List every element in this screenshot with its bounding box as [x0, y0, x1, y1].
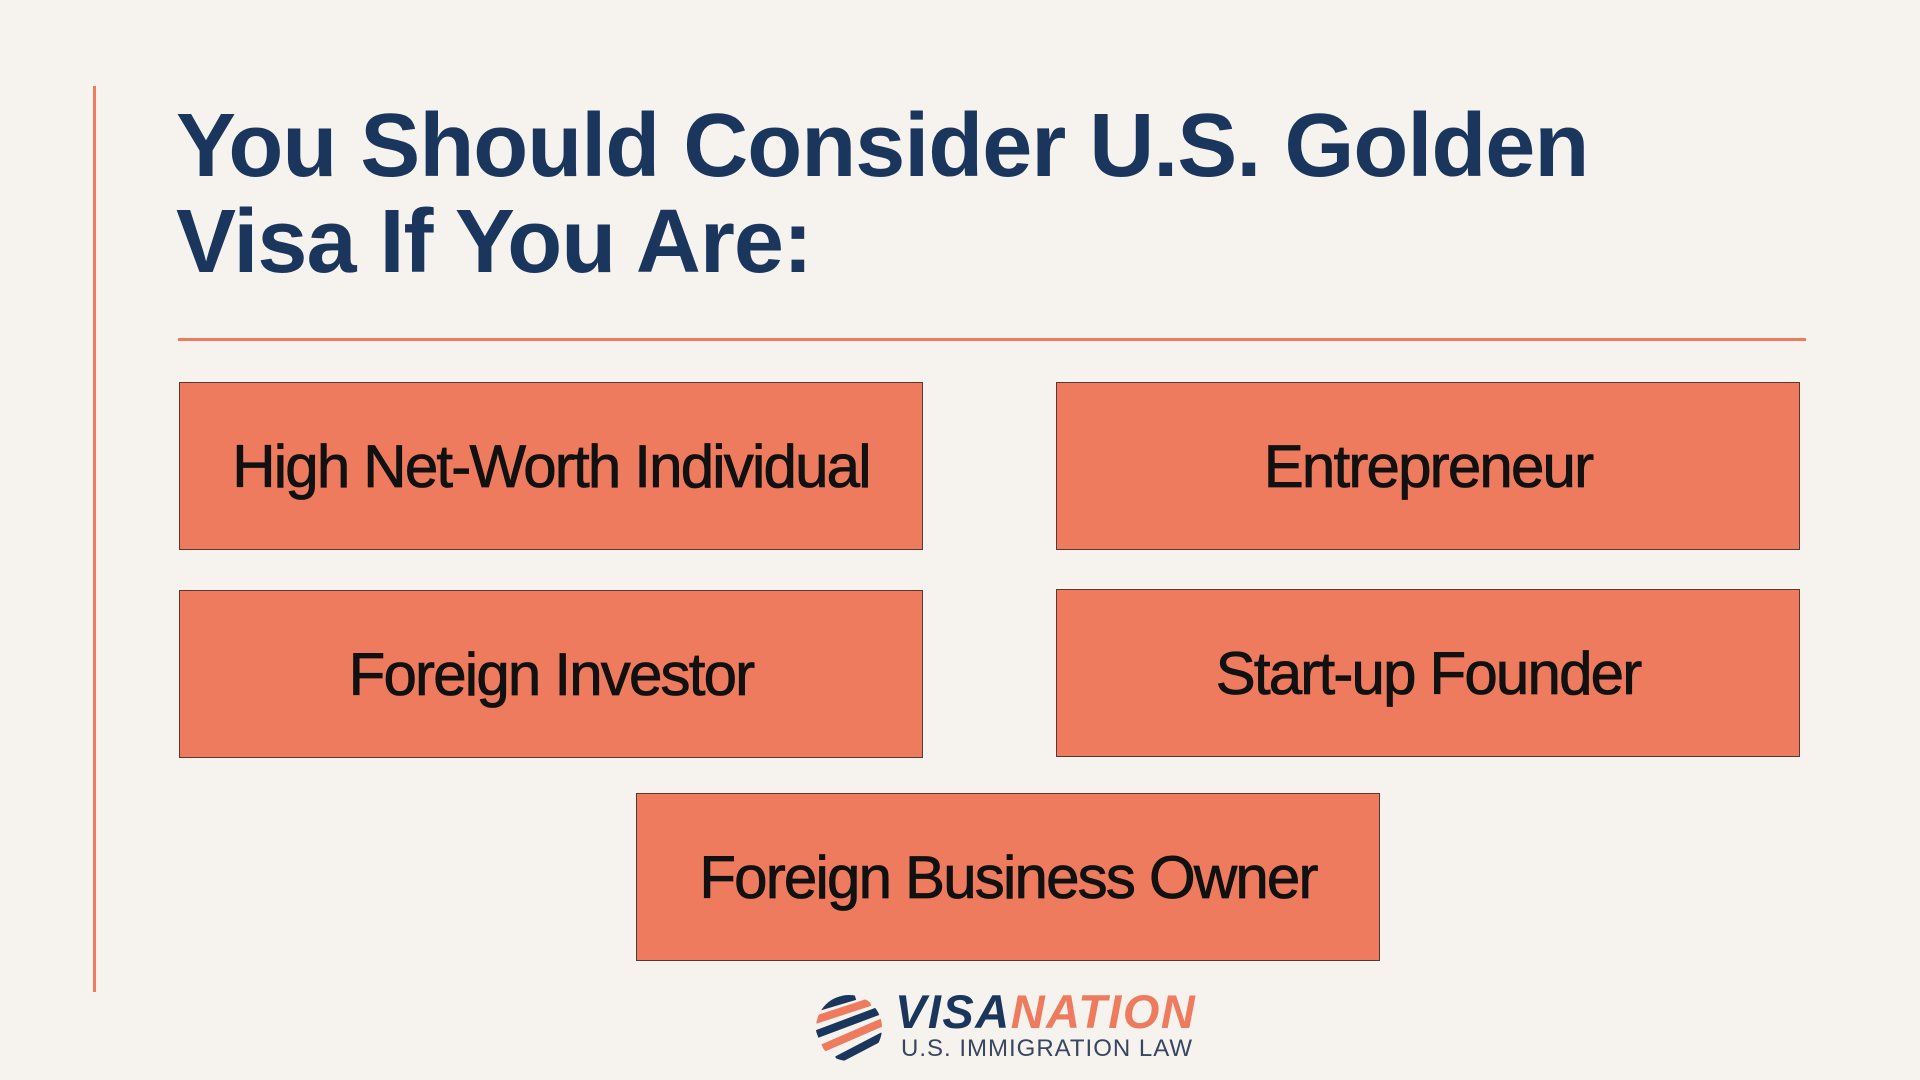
icon: globe — [816, 995, 882, 1061]
box: entrepreneur — [1056, 382, 1800, 550]
title — [176, 96, 1588, 292]
tagline: U.S. IMMIGRATION LAW — [901, 1035, 1193, 1062]
logo — [816, 985, 1196, 1062]
box: entrepreneur: Entrepreneur — [1264, 432, 1592, 500]
box: foreign investor: Foreign Investor — [349, 640, 753, 708]
box: foreign business owner: Foreign Business Owner — [699, 844, 1317, 910]
box: start-up founder: Start-up Founder — [1216, 640, 1640, 706]
brand name: VISANATION — [895, 985, 1196, 1038]
divider — [178, 338, 1806, 341]
box: foreign business owner — [636, 793, 1380, 961]
title: Visa If You Are: — [176, 192, 812, 292]
box: high net-worth: High Net-Worth Individual — [232, 432, 870, 500]
box: foreign investor — [179, 590, 923, 758]
box: high net-worth — [179, 382, 923, 550]
left accent line — [93, 86, 96, 992]
box: start-up founder — [1056, 589, 1800, 757]
title: You Should Consider U.S. Golden — [176, 96, 1588, 196]
